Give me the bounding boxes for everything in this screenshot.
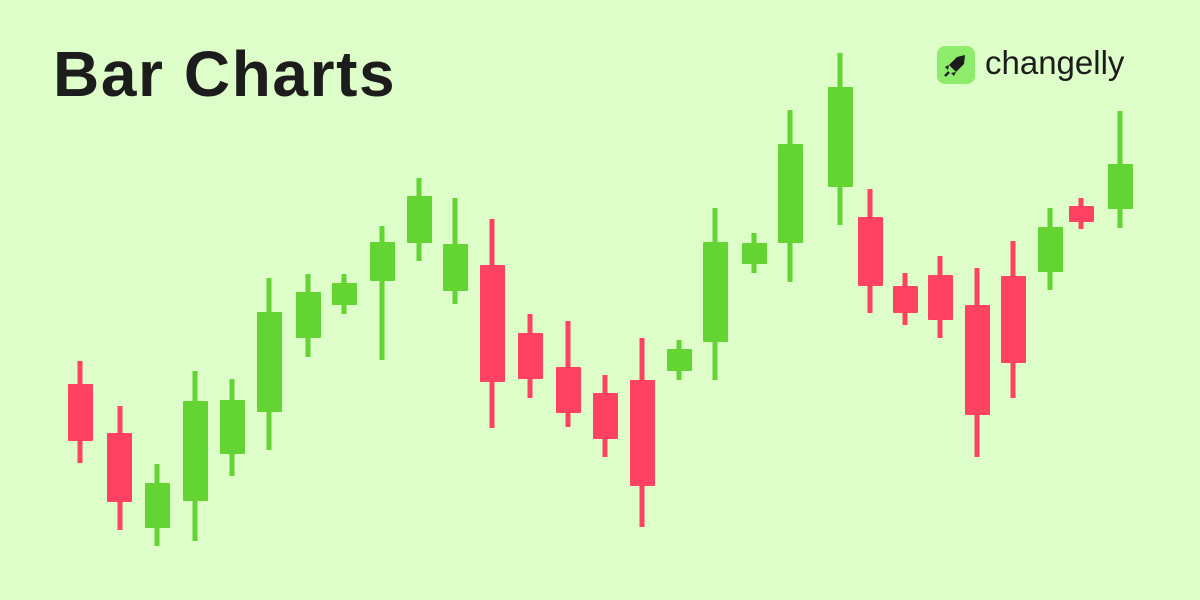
logo: changelly [937, 44, 1124, 84]
title: Bar Charts [53, 38, 396, 110]
logo text: changelly [985, 44, 1124, 81]
icon: rocket [937, 46, 975, 84]
